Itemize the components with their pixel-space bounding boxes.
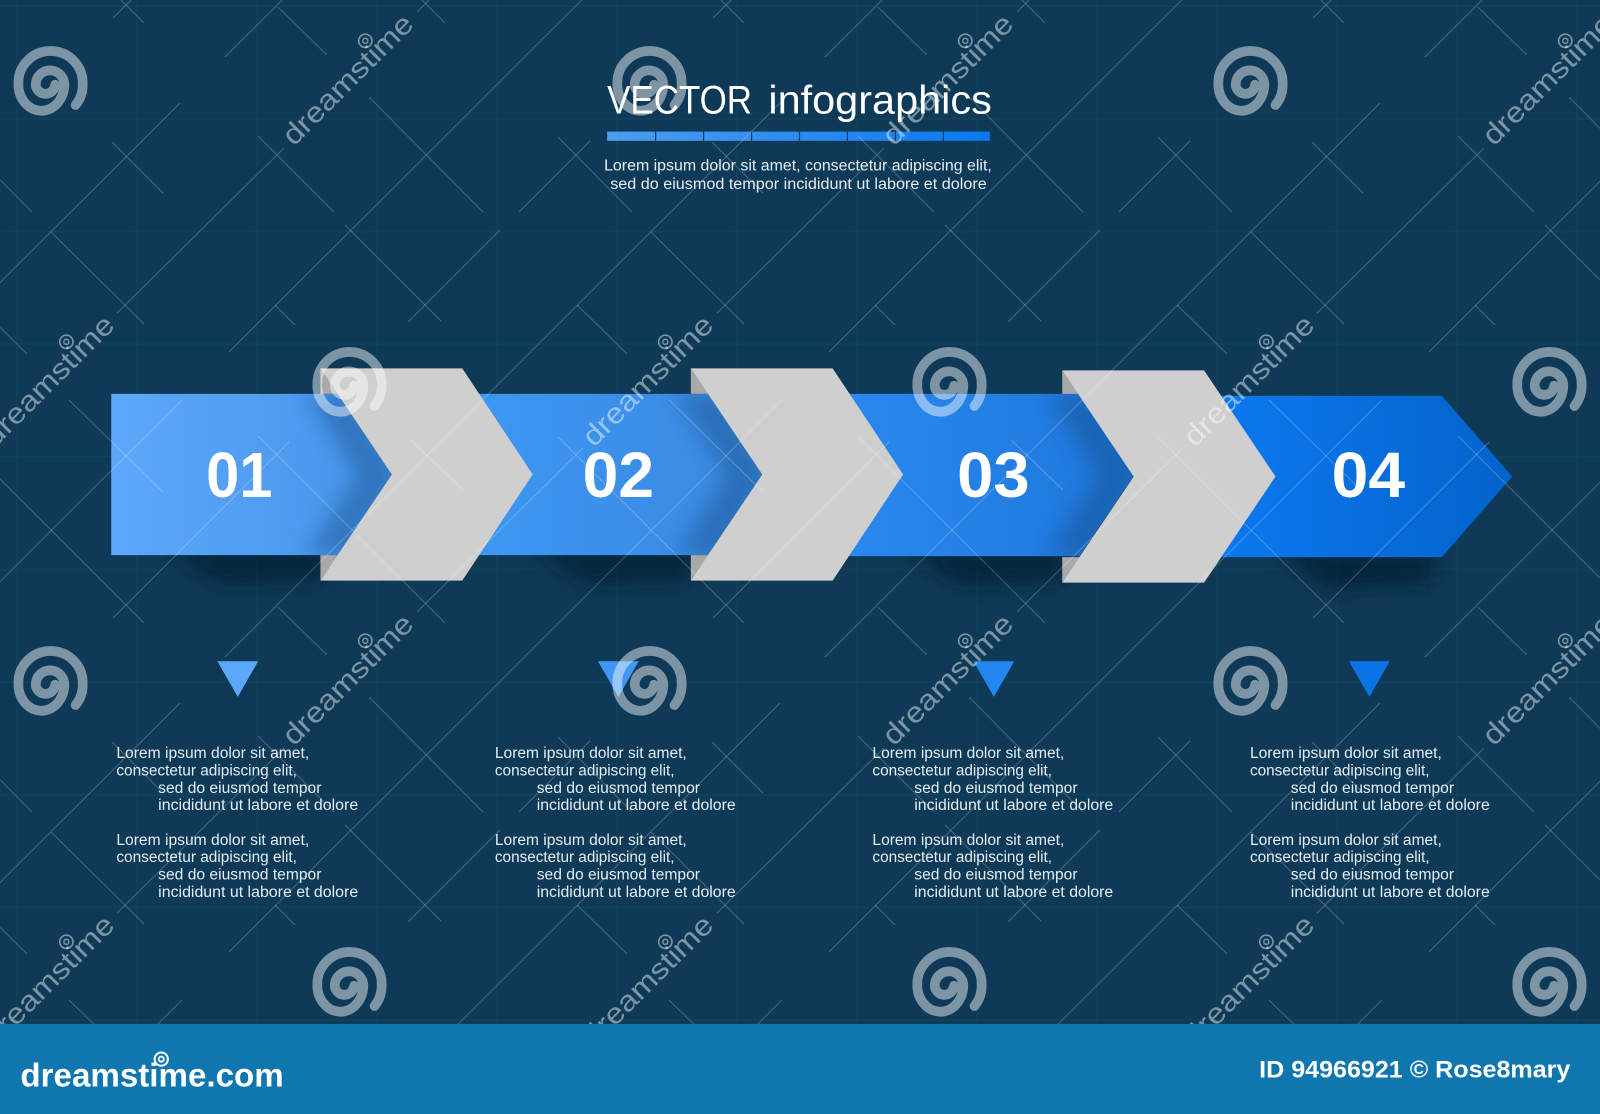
process arrow 3: [848, 370, 1134, 582]
pointer triangle 4: [1349, 661, 1390, 697]
text column 3: Lorem ipsum dolor sit amet,: [872, 832, 1064, 849]
text column 1: Lorem ipsum dolor sit amet,: [116, 832, 309, 849]
text column 1: incididunt ut labore et dolore: [158, 884, 358, 901]
subtitle: [604, 157, 992, 193]
text column 1: [116, 745, 358, 901]
text column 4: consectetur adipiscing elit,: [1250, 762, 1430, 779]
arrow body 2: [449, 394, 762, 555]
text column 2: consectetur adipiscing elit,: [495, 849, 674, 866]
text column 4: sed do eiusmod tempor: [1291, 780, 1454, 797]
grey chevron 1: [320, 368, 533, 581]
text column 2: incididunt ut labore et dolore: [537, 797, 736, 814]
arrow drop shadows: [163, 549, 1434, 590]
process arrow 4: [1189, 396, 1512, 557]
text column 3: consectetur adipiscing elit,: [872, 849, 1052, 866]
footer band: [0, 1024, 1600, 1114]
text column 2: consectetur adipiscing elit,: [495, 762, 674, 779]
text column 3: [872, 745, 1113, 901]
watermark text: dreamstime: [1177, 909, 1321, 1053]
text column 2: Lorem ipsum dolor sit amet,: [495, 832, 687, 849]
text column 1: consectetur adipiscing elit,: [116, 849, 297, 866]
text column 3: sed do eiusmod tempor: [914, 780, 1078, 797]
watermark text: dreamstime: [576, 309, 720, 453]
arrow body 4: [1189, 396, 1512, 557]
footer logo spiral: [155, 1053, 168, 1066]
text column 2: Lorem ipsum dolor sit amet,: [495, 745, 687, 762]
subtitle: Lorem ipsum dolor sit amet, consectetur adipiscing elit,: [604, 157, 992, 174]
watermark text: dreamstime: [276, 608, 420, 752]
watermark text: dreamstime: [876, 8, 1020, 152]
watermark text: dreamstime: [276, 8, 420, 152]
text column 4: sed do eiusmod tempor: [1291, 867, 1454, 884]
text column 2: sed do eiusmod tempor: [537, 780, 700, 797]
text column 4: incididunt ut labore et dolore: [1291, 884, 1490, 901]
inner shadow 2: [677, 394, 770, 555]
text column 1: incididunt ut labore et dolore: [158, 797, 358, 814]
text column 3: sed do eiusmod tempor: [914, 867, 1078, 884]
title: infographics: [768, 78, 992, 122]
arrow body 3: [816, 394, 1134, 556]
title: [607, 78, 992, 122]
number 04: 04: [1332, 439, 1405, 511]
text column 3: Lorem ipsum dolor sit amet,: [872, 745, 1064, 762]
process arrow 2: [479, 368, 762, 580]
watermark text: dreamstime: [1177, 309, 1321, 453]
text column 1: sed do eiusmod tempor: [158, 867, 321, 884]
inner shadow 3: [1048, 394, 1142, 556]
number 03: 03: [957, 439, 1030, 511]
pointer triangle 2: [598, 661, 639, 697]
number 01: 01: [206, 439, 272, 511]
title: VECTOR: [607, 78, 752, 122]
text column 2: [495, 745, 736, 901]
number 02: 02: [583, 439, 654, 511]
text column 4: [1250, 745, 1490, 901]
grey chevron 3: [1062, 370, 1275, 583]
inner shadow 1: [306, 394, 400, 555]
footer credit: ID 94966921 © Rose8mary: [1259, 1057, 1571, 1084]
title bar: [607, 132, 990, 141]
text column 2: sed do eiusmod tempor: [537, 867, 700, 884]
text column 1: sed do eiusmod tempor: [158, 780, 321, 797]
text column 1: Lorem ipsum dolor sit amet,: [116, 745, 309, 762]
text column 2: incididunt ut labore et dolore: [537, 884, 736, 901]
text column 4: consectetur adipiscing elit,: [1250, 849, 1430, 866]
text column 3: consectetur adipiscing elit,: [872, 762, 1052, 779]
text column 4: incididunt ut labore et dolore: [1291, 797, 1490, 814]
pointer triangle 1: [217, 661, 258, 697]
text column 3: incididunt ut labore et dolore: [914, 884, 1113, 901]
process arrow 1: [111, 368, 400, 581]
footer logo: dreamstime.com: [20, 1058, 284, 1095]
watermark text: dreamstime: [876, 608, 1020, 752]
grey chevron 2: [691, 368, 903, 581]
subtitle: sed do eiusmod tempor incididunt ut labore et dolore: [610, 176, 987, 193]
chevron fold 2: [691, 368, 708, 581]
watermark text: dreamstime: [576, 909, 720, 1053]
chevron fold 1: [320, 368, 338, 581]
text column 3: incididunt ut labore et dolore: [914, 797, 1113, 814]
pointer triangle 3: [973, 661, 1014, 697]
arrow body 1: [111, 394, 392, 555]
text column 4: Lorem ipsum dolor sit amet,: [1250, 745, 1442, 762]
chevron fold 3: [1062, 370, 1080, 583]
text column 4: Lorem ipsum dolor sit amet,: [1250, 832, 1442, 849]
text column 1: consectetur adipiscing elit,: [116, 762, 297, 779]
